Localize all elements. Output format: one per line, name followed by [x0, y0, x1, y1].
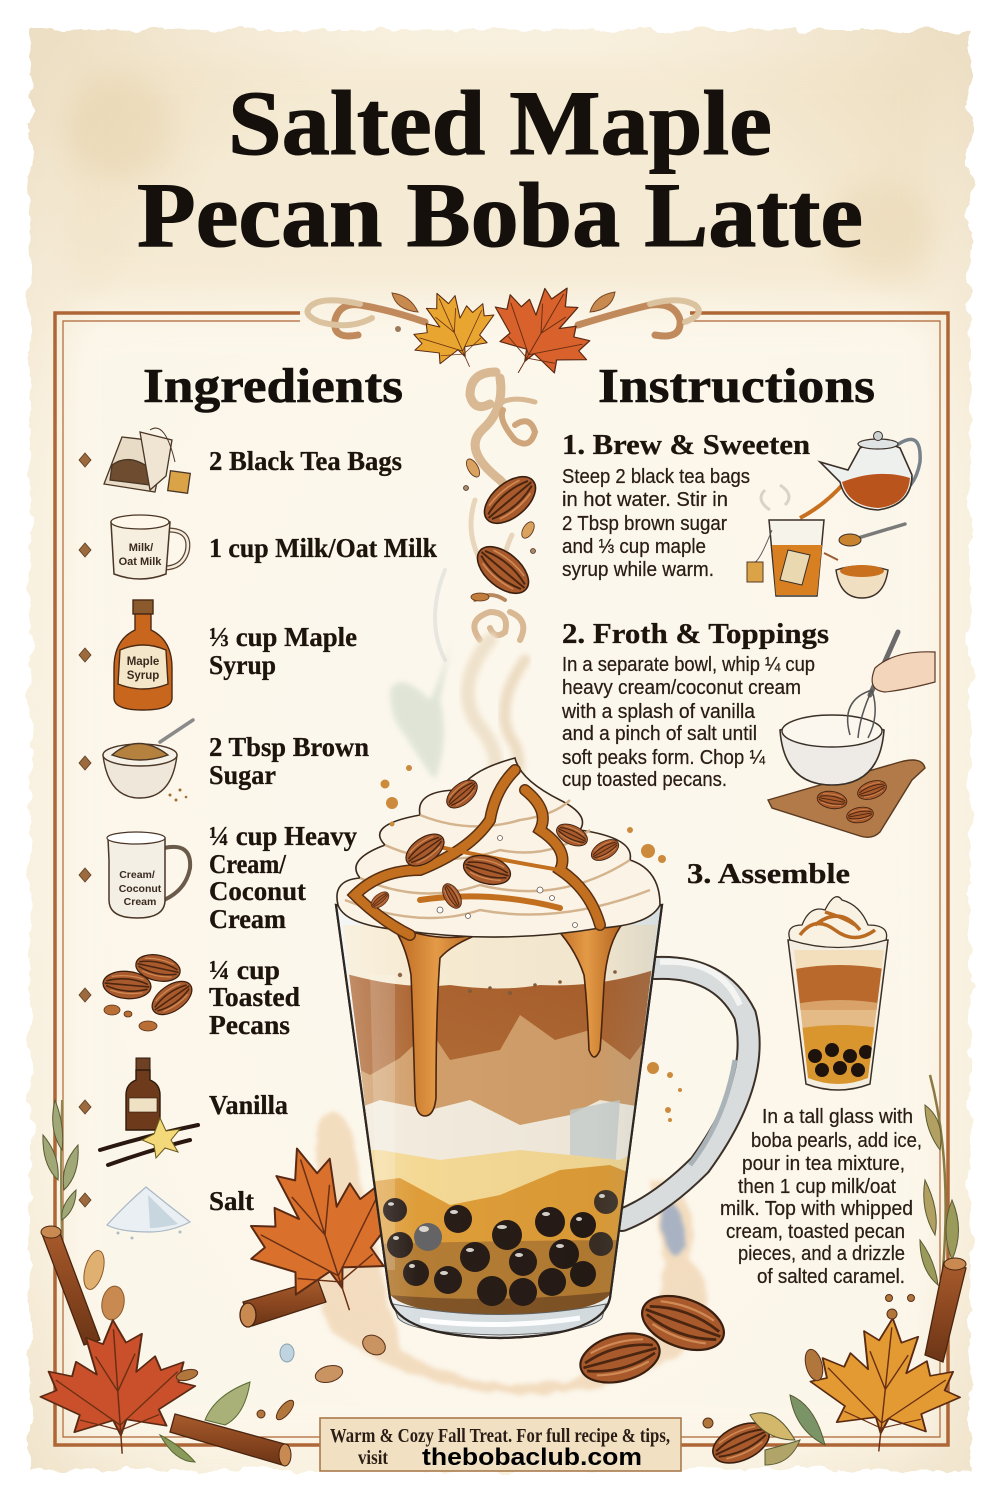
main boba latte mug	[330, 758, 749, 1338]
item: tea: 2 Black Tea Bags	[209, 446, 402, 476]
step 3 text: milk. Top with whipped	[720, 1198, 913, 1220]
swirling steam and falling pecans	[390, 372, 544, 800]
top ornament with maple leaves	[308, 262, 699, 399]
item: heavy cream: Coconut	[209, 876, 306, 906]
step 1 title: 1. Brew & Sweeten	[562, 429, 810, 461]
pale steam	[435, 570, 525, 800]
item: brown sugar: 2 Tbsp Brown	[209, 732, 369, 762]
item: heavy cream: Cream/	[209, 849, 286, 879]
cinnamon stick left	[41, 1226, 100, 1345]
green leaves	[160, 1382, 250, 1462]
glass body	[336, 905, 662, 1338]
leaves and pecan	[703, 1294, 914, 1471]
cinnamon stick under mug	[240, 1280, 326, 1327]
icon: pecan lower	[469, 538, 537, 602]
icon: red maple leaf corner	[35, 1315, 200, 1459]
icon: cream pitcher: Cream	[124, 896, 156, 908]
step 3 text: In a tall glass with	[762, 1106, 913, 1128]
step 1 text	[562, 466, 750, 581]
icon: milk mug: Milk/	[129, 542, 153, 554]
item: milk: 1 cup Milk/Oat Milk	[209, 533, 437, 563]
footer banner	[320, 1418, 681, 1471]
item: brown sugar: Sugar	[209, 760, 276, 790]
grey-green wash	[390, 640, 452, 780]
icon: pecan upper	[476, 468, 544, 532]
corner botanicals left	[35, 1100, 297, 1466]
flourish left	[308, 293, 425, 336]
pecans on cream	[368, 775, 622, 912]
title: Pecan Boba Latte	[137, 164, 863, 266]
cream bubbles	[437, 836, 578, 928]
icon: assembled small glass	[788, 897, 890, 1090]
step 3 text: then 1 cup milk/oat	[738, 1176, 896, 1198]
icon: red maple leaf	[473, 262, 613, 399]
step 2 text: soft peaks form. Chop ¼	[562, 747, 765, 769]
step 1 text: 2 Tbsp brown sugar	[562, 513, 727, 535]
step 2 text: cup toasted pecans.	[562, 769, 727, 791]
icon: pecans	[102, 951, 198, 1031]
frame border	[55, 313, 948, 1445]
step 2 text	[561, 654, 815, 791]
icon: cream pitcher: Coconut	[119, 883, 162, 895]
cinnamon stick right	[925, 1258, 966, 1362]
drink layers	[343, 925, 657, 1314]
mug handle	[622, 962, 749, 1220]
icon: vanilla	[100, 1058, 198, 1165]
icon: whisk, bowl and board	[768, 632, 935, 837]
step 3 text: cream, toasted pecan	[726, 1221, 905, 1243]
icon: spoon and small bowl	[824, 524, 905, 598]
panel: ingredients	[79, 358, 437, 1240]
pecan crumbs	[464, 457, 537, 601]
title: Salted Maple	[228, 72, 772, 174]
icon: large maple leaf by mug	[223, 1125, 423, 1334]
step 3 text	[720, 1106, 922, 1288]
step 3 text: of salted caramel.	[757, 1266, 905, 1288]
step 3 text: pieces, and a drizzle	[738, 1243, 905, 1265]
heading: instructions: Instructions	[598, 358, 875, 413]
caramel drips	[392, 922, 624, 1116]
item: maple syrup: Syrup	[209, 650, 276, 680]
icon: maple syrup bottle	[114, 600, 172, 710]
icon: teapot pouring	[800, 432, 920, 518]
icon: maple syrup bottle: Maple	[127, 656, 159, 668]
boba pearls	[383, 1190, 618, 1306]
panel: instructions	[561, 358, 935, 1288]
icon: cream pitcher: Cream/	[119, 869, 155, 881]
icon: salt pile	[107, 1187, 190, 1240]
flourish right	[578, 292, 699, 336]
icon: yellow maple leaf	[397, 276, 509, 384]
footer visit: visit	[358, 1448, 388, 1469]
glass base and shine	[393, 1304, 606, 1335]
pecans on table	[280, 1286, 731, 1391]
watercolor stains behind mug	[312, 1112, 708, 1395]
item: salt: Salt	[209, 1186, 254, 1216]
step 3 text: pour in tea mixture,	[742, 1153, 905, 1175]
caramel drizzle	[355, 770, 600, 935]
item: vanilla: Vanilla	[209, 1090, 288, 1120]
step 1 text: in hot water. Stir in	[562, 489, 728, 511]
item: heavy cream	[209, 821, 357, 934]
step 2 text: In a separate bowl, whip ¼ cup	[562, 654, 815, 676]
bullet diamonds	[79, 453, 91, 1207]
item: pecans: Toasted	[209, 982, 300, 1012]
step 3 title: 3. Assemble	[687, 858, 850, 890]
icon: maple syrup bottle: Syrup	[127, 670, 159, 682]
corner botanicals right	[703, 1075, 968, 1471]
step 2 text: with a splash of vanilla	[561, 701, 756, 723]
step 2 text: heavy cream/coconut cream	[562, 677, 801, 699]
icon: milk mug: Oat Milk	[119, 556, 162, 568]
item: brown sugar	[209, 732, 369, 790]
vine left	[43, 1100, 78, 1240]
paint splatters	[380, 765, 682, 1122]
icon: milk mug	[111, 515, 188, 579]
icon: cream pitcher	[107, 832, 190, 918]
item: maple syrup	[209, 622, 357, 680]
icon: tea bags	[104, 428, 190, 493]
vine right	[920, 1075, 958, 1300]
whipped cream	[337, 758, 660, 937]
step 3 text: boba pearls, add ice,	[751, 1130, 922, 1152]
cinnamon stick bottom	[170, 1414, 291, 1466]
icon: brown sugar bowl	[103, 720, 193, 802]
step 2 text: and a pinch of salt until	[562, 723, 757, 745]
footer text: Warm & Cozy Fall Treat. For full recipe & tips,	[330, 1426, 670, 1447]
item: pecans: ¼ cup	[209, 955, 280, 985]
item: heavy cream: Cream	[209, 904, 286, 934]
icon: orange maple leaf corner	[804, 1310, 968, 1459]
title	[137, 72, 863, 266]
item: pecans: Pecans	[209, 1010, 290, 1040]
step 2 title: 2. Froth & Toppings	[562, 618, 829, 650]
step 1 text: syrup while warm.	[562, 559, 714, 581]
footer url: thebobaclub.com	[422, 1444, 642, 1471]
step 1 text: Steep 2 black tea bags	[562, 466, 750, 488]
icon: tea glass with bag	[747, 485, 824, 596]
heading: ingredients: Ingredients	[143, 358, 403, 413]
item: pecans	[209, 955, 300, 1040]
item: maple syrup: ⅓ cup Maple	[209, 622, 357, 652]
step 1 text: and ⅓ cup maple	[562, 536, 706, 558]
item: heavy cream: ¼ cup Heavy	[209, 821, 357, 851]
